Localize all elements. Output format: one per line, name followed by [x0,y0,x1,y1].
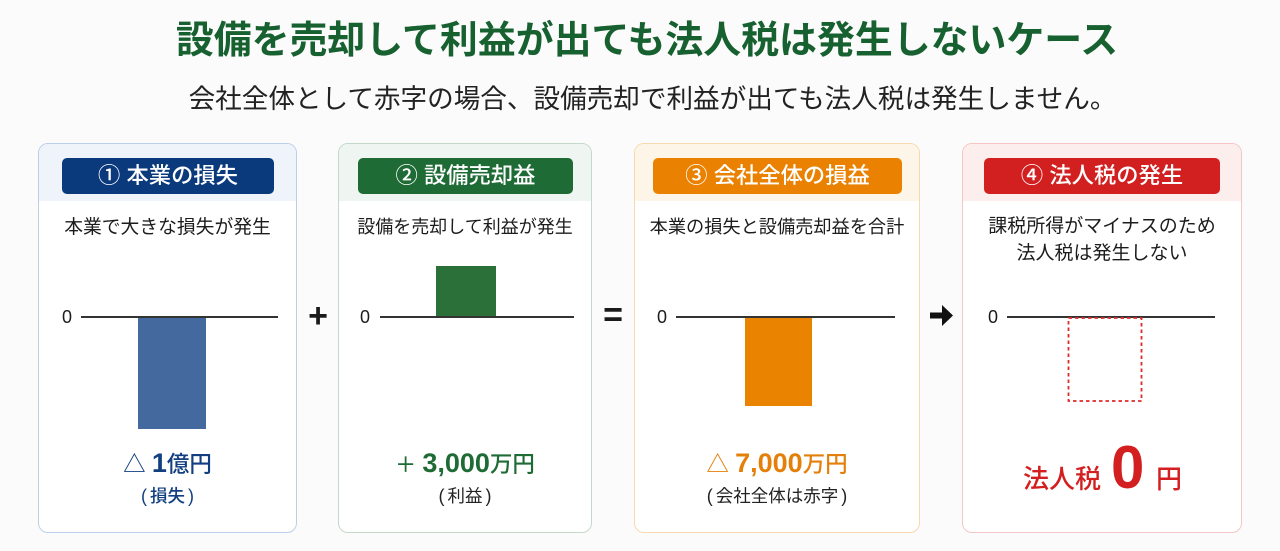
text: 法人税の説明 [988,216,1216,264]
text: 法人税の説明: 課税所得がマイナスのため [988,216,1216,237]
chart: 会社全体の損益バー [657,307,895,406]
chart: 会社全体の損益バー: 0 [657,307,667,327]
value: 法人税0円: 円 [1156,464,1182,494]
text: 設備売却の説明: 設備を売却して利益が発生 [357,217,573,237]
value: 法人税0円: 法人税 [1023,464,1101,494]
text: 本業の説明: 本業で大きな損失が発生 [64,216,271,237]
note: 会社全体は赤字: (会社全体は赤字) [707,486,847,506]
chart: 本業の損失バー: 0 [62,307,72,327]
note: 損失: (損失) [141,486,194,506]
chart: 本業の損失バー [62,307,278,429]
operator: equals: = [603,296,623,334]
heading: 本業の損失: ① 本業の損失 [98,163,238,188]
heading: 本業の損失 [62,158,274,194]
heading: 法人税の発生 [984,158,1220,194]
value: 損失額: △ 1億円 [123,448,212,478]
heading: 法人税の発生: ④ 法人税の発生 [1021,163,1183,188]
value: 法人税0円: 0 [1111,434,1144,501]
panel: 会社全体の損益 [634,143,920,533]
chart: 設備売却益バー [360,266,574,327]
chart: 法人税ゼロの点線枠 [988,307,1215,402]
note: 利益: (利益) [438,486,492,506]
heading: 設備売却益: ② 設備売却益 [396,163,535,188]
subtitle: 会社全体として赤字の場合、設備売却で利益が出ても法人税は発生しません。 [189,84,1116,114]
heading: 会社全体の損益 [653,158,902,194]
text: 会社全体の説明: 本業の損失と設備売却益を合計 [650,217,904,237]
arrow [930,305,953,326]
panel: 設備売却益 [338,143,592,533]
value: 利益額: ＋ 3,000万円 [395,448,535,478]
panel: 本業の損失 [38,143,297,533]
chart: 法人税ゼロの点線枠: 0 [988,307,998,327]
chart: 設備売却益バー: 0 [360,307,370,327]
text: 法人税の説明: 法人税は発生しない [1016,243,1188,264]
heading: 設備売却益 [358,158,573,194]
heading: 会社全体の損益: ③ 会社全体の損益 [685,163,870,188]
value: 法人税0円 [1023,434,1182,501]
panel: 法人税の発生 [962,143,1242,533]
value: 会社全体の損失額: △ 7,000万円 [706,448,848,478]
title: 設備を売却して利益が出ても法人税は発生しないケース [176,20,1118,62]
operator: plus: + [308,297,328,335]
